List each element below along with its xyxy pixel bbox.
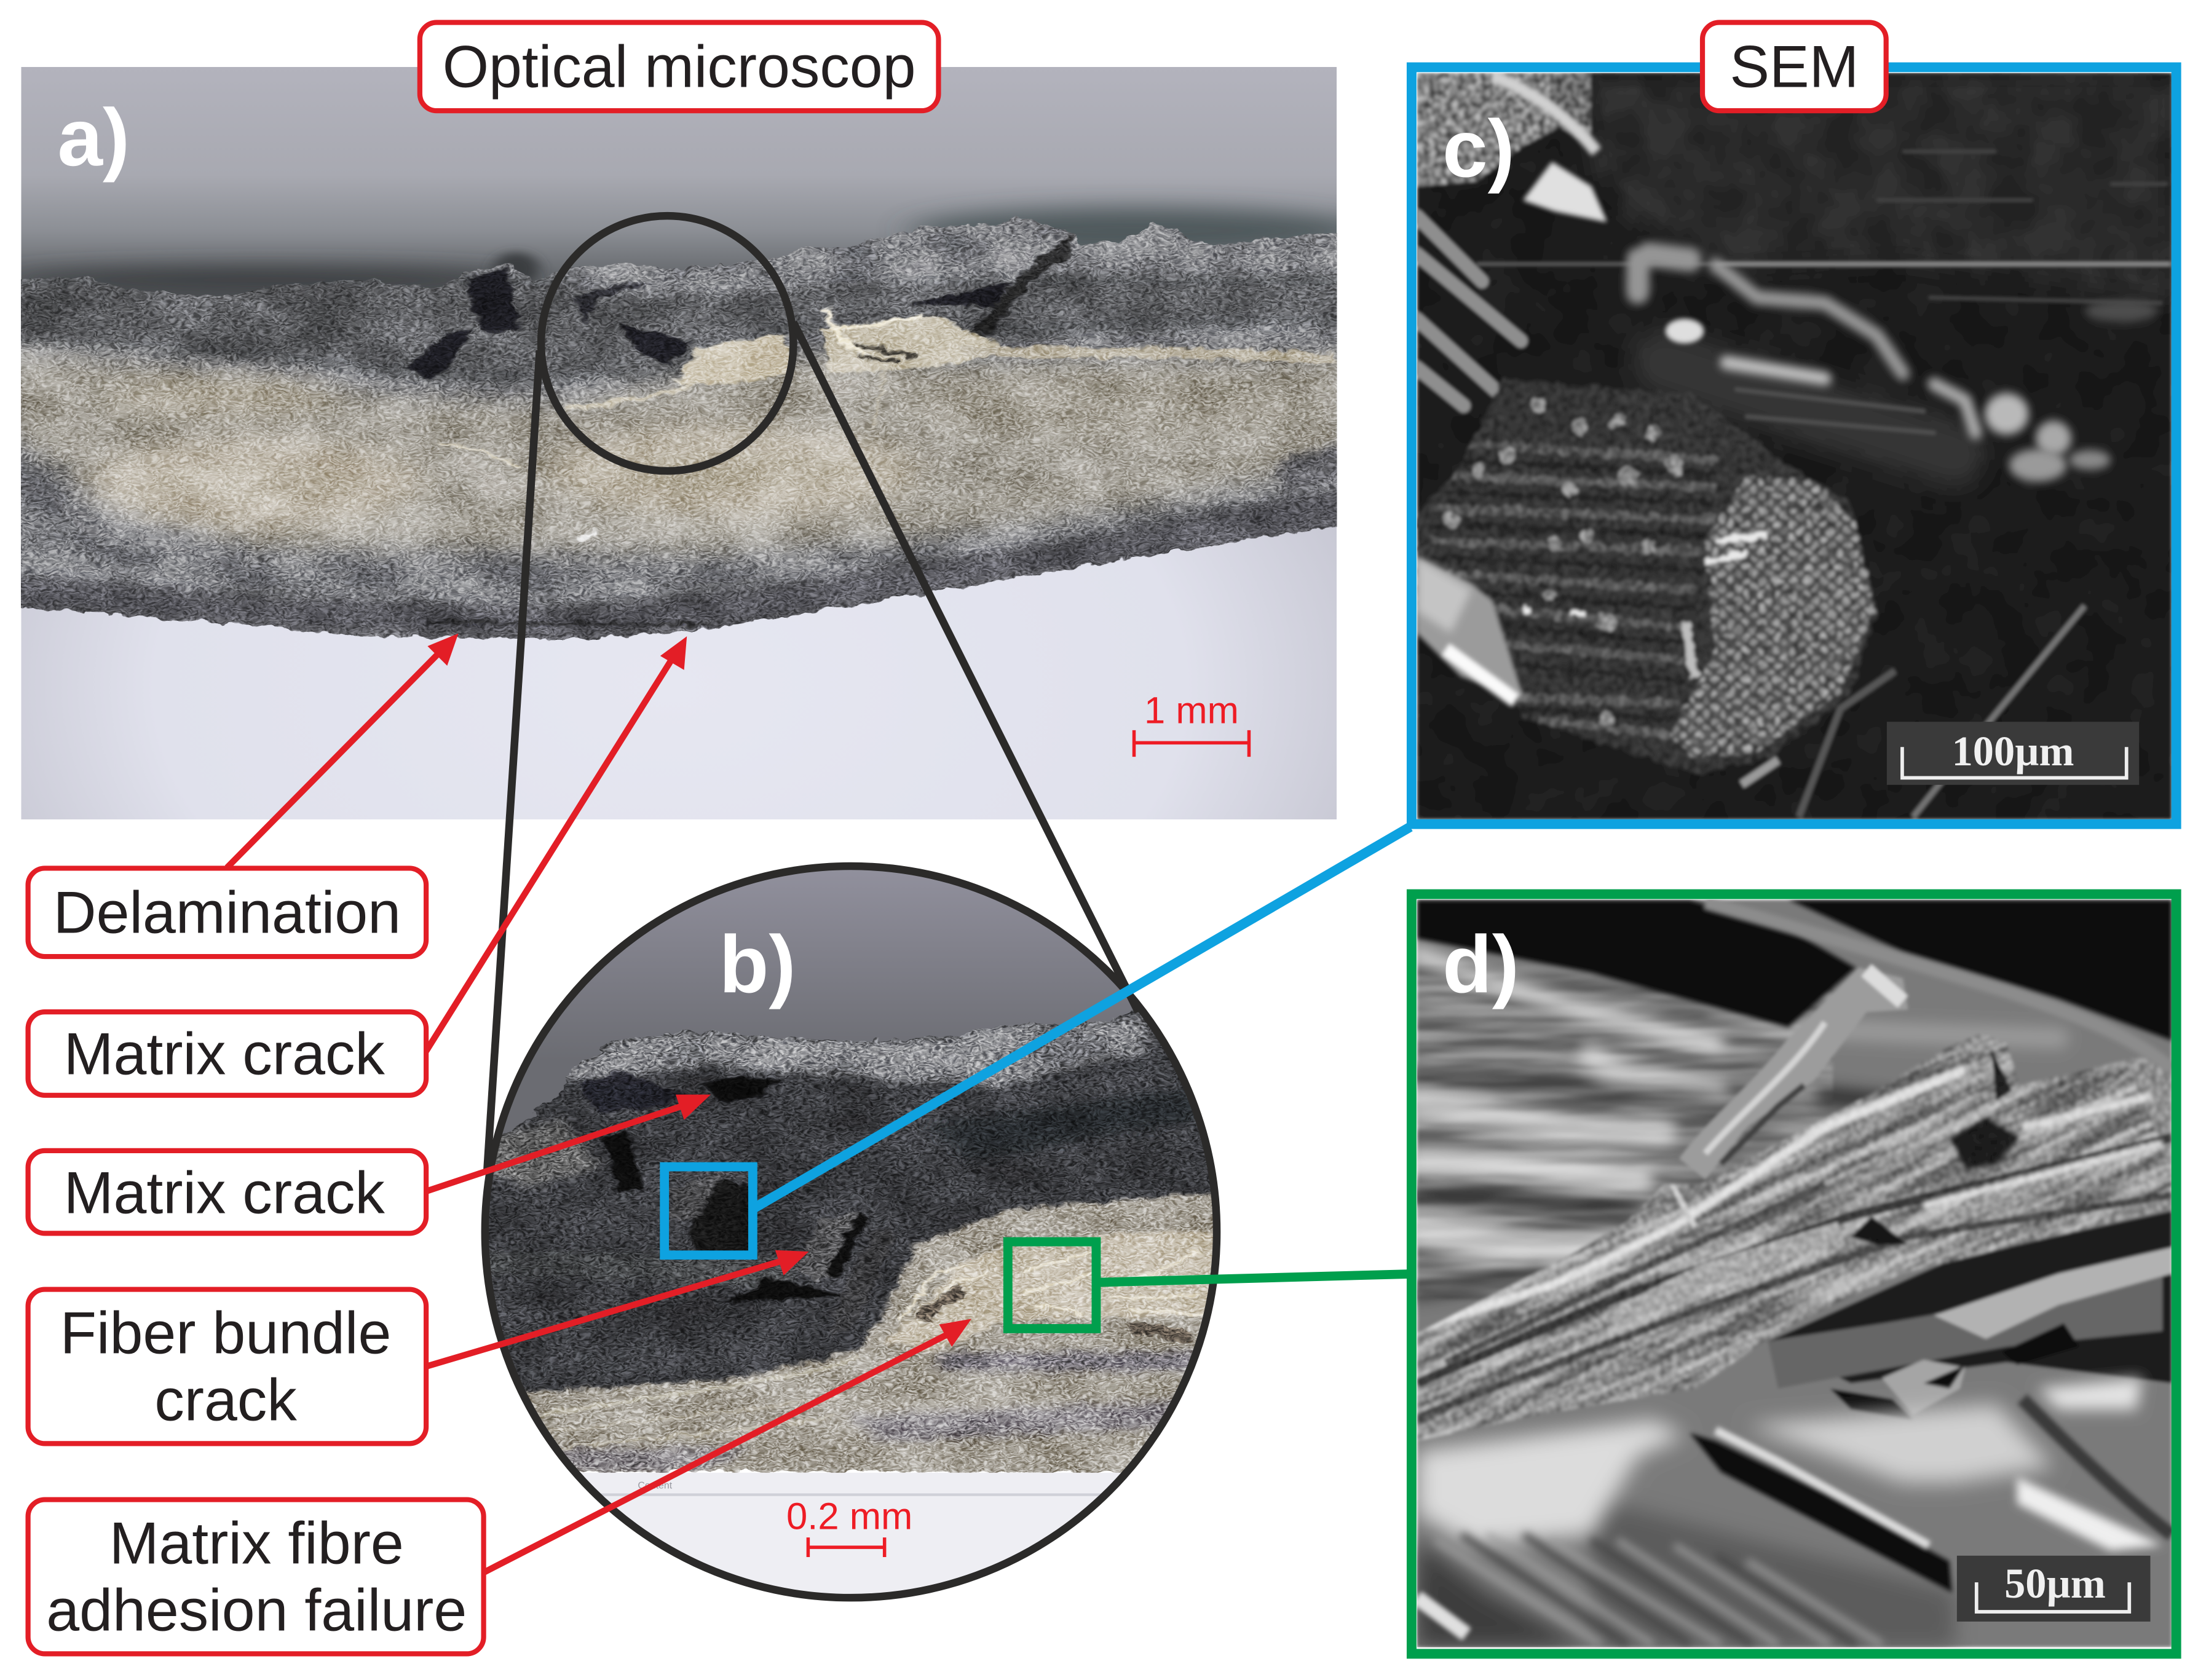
heading: Optical microscop: Optical microscop [443, 33, 916, 100]
blue connector from box to panel c [754, 827, 1410, 1208]
main fibre bundle [1342, 954, 2183, 1513]
photo c [1404, 73, 2172, 819]
heading: SEM [1702, 22, 1886, 111]
callout: Fiber bundle crack: Fiber bundle [60, 1299, 391, 1366]
frame d [1412, 894, 2176, 1654]
blue region box [665, 1167, 753, 1255]
white lower area of screenshot [476, 1473, 1235, 1606]
fibre bundle [1404, 368, 1887, 784]
faded caption in screenshot: Content [638, 1480, 673, 1491]
callout: Delamination: Delamination [53, 878, 401, 945]
left fabric streaks [1417, 955, 2058, 1295]
callout: Matrix crack 2: Matrix crack [64, 1159, 385, 1226]
callout: Matrix fibre adhesion failure: Matrix fibre [109, 1509, 404, 1576]
cross-section inside b [441, 1002, 1253, 1480]
label d: d) [1442, 919, 1519, 1010]
fibre tear [441, 307, 1337, 540]
fibres [538, 1252, 1209, 1448]
arrow: adhesion failure [484, 1319, 971, 1572]
label a: a) [57, 92, 130, 183]
callout: Fiber bundle crack: crack [154, 1366, 297, 1434]
scale bar 1 mm [1134, 689, 1249, 757]
thin fibre [1680, 968, 1908, 1180]
heading: SEM: SEM [1730, 33, 1859, 100]
green region box [1008, 1242, 1096, 1328]
callout: Matrix fibre adhesion failure [28, 1500, 484, 1654]
callout: Matrix crack 1: Matrix crack [64, 1020, 385, 1087]
cracks and broken bundles [578, 1071, 897, 1339]
scale bar 100 micrometres: 100µm [1952, 728, 2074, 775]
scale bar 100 micrometres [1887, 722, 2139, 785]
zoom connector: black circle and lines [485, 216, 1217, 1598]
photo d [1342, 900, 2183, 1647]
panel d: SEM image [1342, 894, 2183, 1654]
frame c [1412, 67, 2176, 824]
secondary fibres, lower right [1934, 1247, 2172, 1339]
cracks [406, 233, 1072, 627]
heading: Optical microscop [420, 22, 938, 111]
green connector from box to panel d [1097, 1274, 1410, 1282]
arrow: matrix crack in b [426, 1095, 711, 1191]
scale bar 50 micrometres: 50µm [2004, 1560, 2106, 1607]
specimen cross-section [0, 208, 1359, 648]
callout: Matrix crack 1 [28, 1012, 426, 1095]
callout: Delamination [28, 868, 426, 956]
callout: Matrix crack 2 [28, 1151, 426, 1233]
callout: Matrix fibre adhesion failure: adhesion failure [46, 1577, 467, 1644]
scale bar 0.2 mm [786, 1495, 912, 1557]
lower bright surfaces [1591, 1498, 1955, 1647]
callout: Fiber bundle crack [28, 1290, 426, 1443]
label b: b) [719, 919, 796, 1010]
panel c: SEM image [1404, 67, 2176, 824]
panel b: magnified circular micrograph [441, 859, 1253, 1606]
top-left debris [1417, 73, 1594, 187]
scale bar 1 mm: 1 mm [1144, 689, 1239, 732]
arrow: matrix crack lower edge [426, 636, 687, 1051]
photo a [0, 67, 1367, 819]
label c: c) [1442, 103, 1515, 194]
dark gaps below bundle [1768, 1211, 2172, 1383]
scale bar 50 micrometres [1957, 1556, 2150, 1622]
scale bar 0.2 mm: 0.2 mm [786, 1495, 912, 1537]
panel a: optical micrograph [0, 67, 1367, 819]
arrow: delamination [227, 634, 459, 867]
arrow: fiber bundle crack [426, 1250, 809, 1366]
photo b [441, 859, 1253, 1606]
